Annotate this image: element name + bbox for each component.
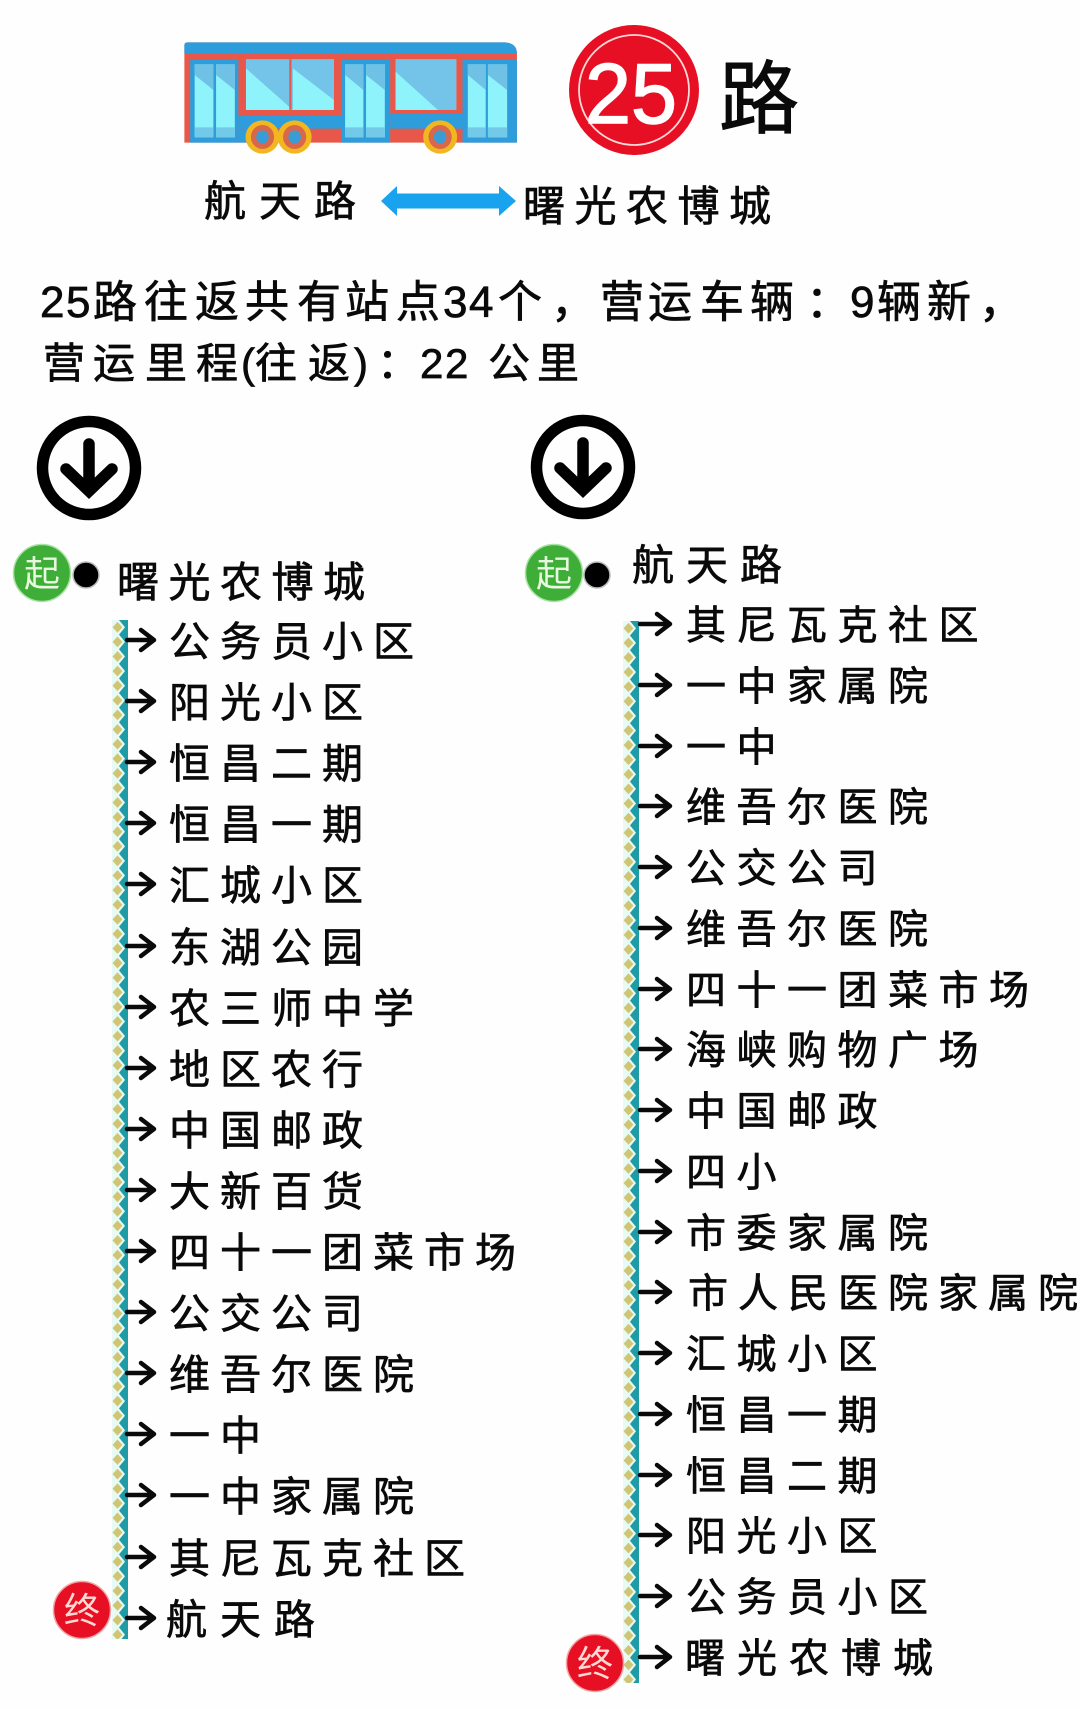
header: route number badge: 25 — [585, 47, 677, 142]
stop: 曙光农博城: 曙光农博城 — [685, 1637, 945, 1681]
stop: 其尼瓦克社区: 其尼瓦克社区 — [169, 1536, 475, 1582]
start stop left: 曙光农博城 — [117, 559, 365, 606]
stop: 市人民医院家属院: 市人民医院家属院 — [688, 1272, 1080, 1316]
stop: 农三师中学: 农三师中学 — [169, 986, 424, 1032]
header: bus illustration — [184, 42, 517, 154]
route strip right — [623, 621, 639, 1683]
icon: down arrow right — [536, 420, 630, 514]
panel: left route — [14, 544, 526, 1643]
stop: 地区农行: 地区农行 — [169, 1047, 373, 1093]
start dot left — [73, 562, 99, 588]
stop: 中国邮政: 中国邮政 — [169, 1108, 373, 1154]
stop: 恒昌二期: 恒昌二期 — [686, 1455, 888, 1499]
stop: 市委家属院: 市委家属院 — [686, 1212, 938, 1256]
start badge left: 起 — [24, 553, 60, 594]
end badge right: 终 — [577, 1643, 613, 1684]
intro text line 2: 营运里程(往返)：22 公里 — [43, 340, 579, 387]
start badge left — [14, 544, 70, 602]
stop: 阳光小区: 阳光小区 — [169, 680, 373, 726]
intro text line 1: 25路往返共有站点34个，营运车辆：9辆新， — [40, 278, 1023, 327]
start badge right — [526, 544, 582, 602]
stop: 汇城小区: 汇城小区 — [169, 863, 373, 909]
end badge right — [566, 1634, 624, 1692]
header: route number badge — [569, 25, 699, 155]
stop: 东湖公园: 东湖公园 — [169, 925, 373, 971]
stop: 一中家属院: 一中家属院 — [686, 665, 938, 709]
header: route label: 路 — [719, 55, 799, 144]
icon: double arrow — [381, 186, 516, 216]
header: terminus left: 航天路 — [204, 178, 356, 225]
stop: 一中 — [640, 726, 787, 770]
stop: 四十一团菜市场: 四十一团菜市场 — [169, 1230, 526, 1276]
stop: 恒昌二期: 恒昌二期 — [169, 741, 373, 787]
stop: 公务员小区: 公务员小区 — [169, 619, 424, 665]
stop: 一中: 一中 — [169, 1413, 271, 1459]
stop: 阳光小区: 阳光小区 — [686, 1515, 888, 1559]
stop: 维吾尔医院: 维吾尔医院 — [686, 786, 938, 830]
stop: 公务员小区: 公务员小区 — [686, 1576, 938, 1620]
stop: 一中: 一中 — [686, 726, 787, 770]
stop: 航天路: 航天路 — [166, 1597, 328, 1643]
stop: 大新百货: 大新百货 — [169, 1169, 373, 1215]
end badge left: 终 — [64, 1590, 100, 1631]
start dot right — [584, 562, 610, 588]
end badge left — [54, 1582, 110, 1638]
stop: 恒昌一期: 恒昌一期 — [686, 1394, 888, 1438]
start badge right: 起 — [536, 553, 572, 594]
panel: right route — [526, 542, 1080, 1692]
stop: 四小: 四小 — [686, 1151, 787, 1195]
stop: 维吾尔医院: 维吾尔医院 — [686, 908, 938, 952]
stop: 海峡购物广场: 海峡购物广场 — [686, 1029, 989, 1073]
stop: 公交公司: 公交公司 — [686, 847, 888, 891]
stop: 其尼瓦克社区: 其尼瓦克社区 — [686, 604, 989, 648]
stop: 一中家属院: 一中家属院 — [169, 1474, 424, 1520]
stop: 公交公司: 公交公司 — [169, 1291, 373, 1337]
stop: 四小 — [640, 1151, 787, 1195]
icon: down arrow left — [42, 422, 136, 514]
stop: 四十一团菜市场: 四十一团菜市场 — [686, 969, 1040, 1013]
route strip left — [112, 620, 128, 1639]
start stop right: 航天路 — [632, 542, 782, 589]
stop: 恒昌一期: 恒昌一期 — [169, 802, 373, 848]
stop: 汇城小区: 汇城小区 — [686, 1333, 888, 1377]
stop: 维吾尔医院: 维吾尔医院 — [169, 1352, 424, 1398]
header: terminus right: 曙光农博城 — [523, 183, 771, 230]
stop: 中国邮政: 中国邮政 — [686, 1090, 888, 1134]
